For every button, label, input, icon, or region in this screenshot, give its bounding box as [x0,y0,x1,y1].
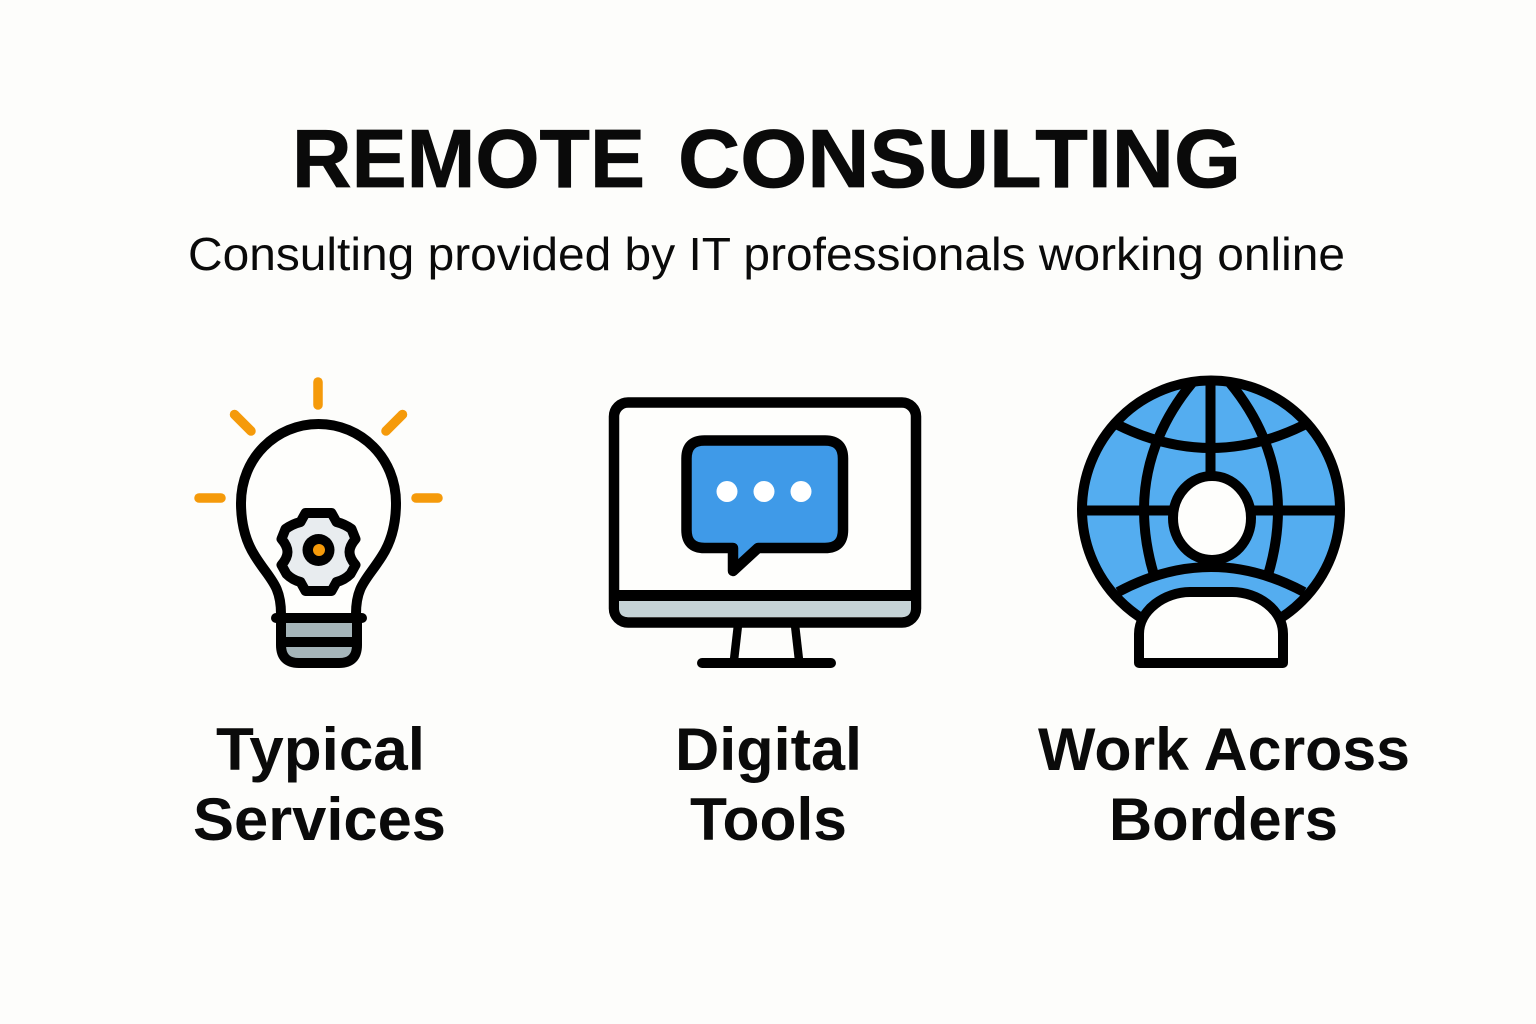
panel: typical services [193,382,446,853]
person shoulders [1139,592,1283,663]
monitor stand [702,625,831,663]
label: digital tools: Tools [690,786,847,853]
label: typical services [193,716,446,853]
title [292,112,1241,205]
icon: monitor with chat bubble [614,402,916,663]
gear [282,513,356,591]
panel: work across borders [1038,380,1410,853]
chat dots [716,481,812,502]
title: REMOTE [292,112,645,205]
person head [1173,476,1251,560]
monitor chin [619,601,911,617]
globe [1082,380,1340,638]
label: work across borders [1038,716,1410,853]
monitor screen [614,402,916,622]
label: typical services: Typical [216,716,425,783]
label: work across borders: Work Across [1038,716,1410,783]
panel: digital tools [614,402,916,853]
light rays [199,382,438,498]
bulb base [276,618,362,663]
subtitle: Consulting provided by IT professionals working online [188,228,1345,280]
bulb outline [241,424,396,614]
label: typical services: Services [193,786,446,853]
label: digital tools: Digital [675,716,862,783]
label: digital tools [675,716,862,853]
icon: globe with person [1082,380,1340,663]
title: CONSULTING [678,112,1241,205]
label: work across borders: Borders [1109,786,1338,853]
icon: light bulb with gear [199,382,438,663]
chat bubble [686,440,843,571]
